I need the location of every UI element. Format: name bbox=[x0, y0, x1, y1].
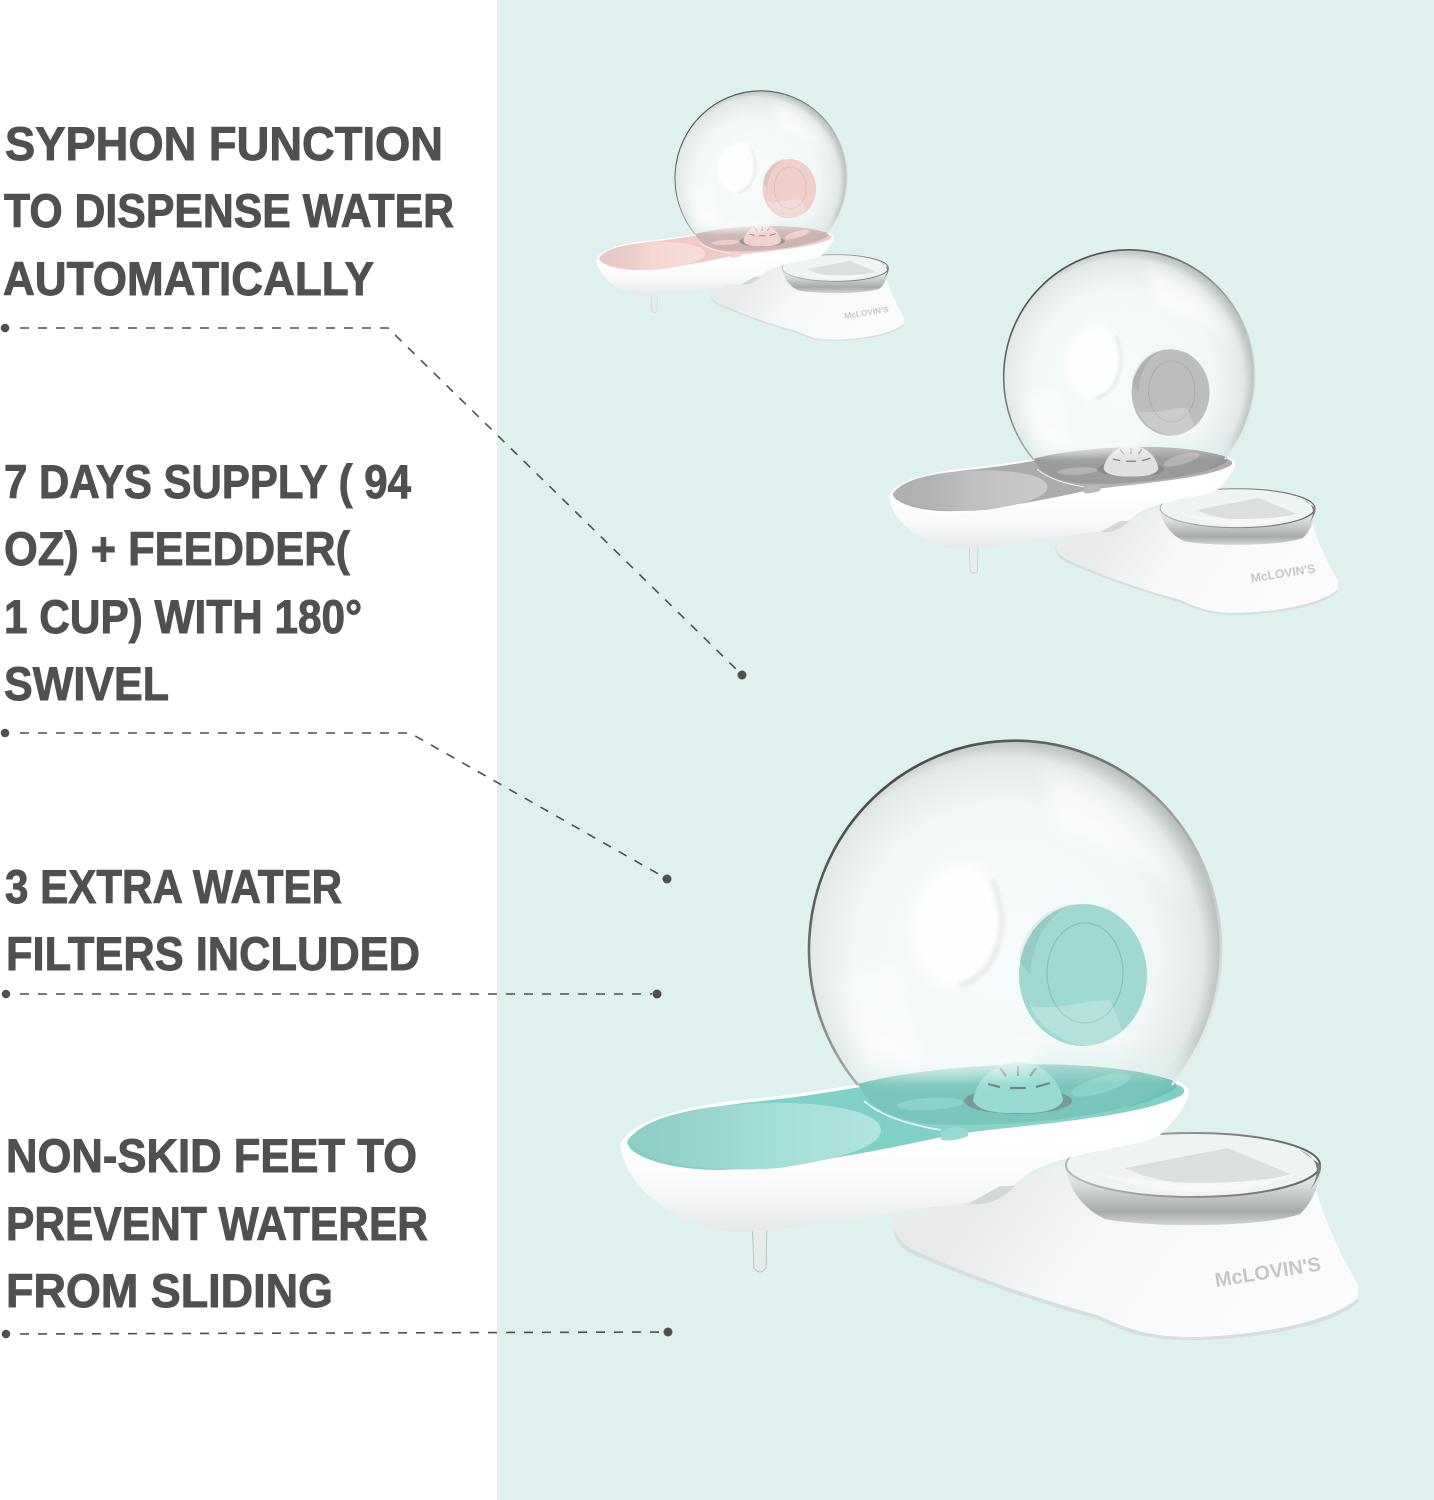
callout line: non-skid feet bbox=[2, 1328, 672, 1338]
text block: non-skid feet: PREVENT WATERER bbox=[6, 1197, 428, 1250]
product: large teal water dispenser bbox=[620, 741, 1358, 1340]
text block: syphon function: TO DISPENSE WATER bbox=[4, 184, 454, 237]
callout line: water filters bbox=[2, 990, 661, 998]
text block: water filters: FILTERS INCLUDED bbox=[6, 927, 420, 980]
text block: syphon function: SYPHON FUNCTION bbox=[5, 117, 443, 170]
panel: mint product background bbox=[497, 0, 1434, 1500]
text block: non-skid feet: FROM SLIDING bbox=[6, 1264, 333, 1317]
text block: water filters: 3 EXTRA WATER bbox=[5, 860, 342, 913]
background: white left column bbox=[0, 0, 497, 1500]
text block: syphon function bbox=[3, 117, 454, 305]
text block: 7 days supply bbox=[4, 455, 411, 710]
text block: water filters bbox=[5, 860, 420, 980]
text block: 7 days supply: OZ) + FEEDDER( bbox=[4, 522, 350, 575]
text block: 7 days supply: 1 CUP) WITH 180° bbox=[4, 590, 362, 643]
callout line: 7 days supply bbox=[1, 729, 671, 884]
product: medium gray water dispenser: McLOVIN'S bbox=[1250, 561, 1316, 585]
product: small pink water dispenser bbox=[596, 91, 904, 341]
callout line: syphon function bbox=[1, 324, 746, 680]
product: small pink water dispenser: McLOVIN'S bbox=[844, 304, 890, 321]
product: large teal water dispenser: McLOVIN'S bbox=[1213, 1253, 1322, 1292]
text block: non-skid feet bbox=[6, 1129, 428, 1317]
text block: non-skid feet: NON-SKID FEET TO bbox=[6, 1129, 417, 1182]
product: medium gray water dispenser bbox=[889, 250, 1338, 615]
text block: syphon function: AUTOMATICALLY bbox=[3, 252, 374, 305]
text block: 7 days supply: 7 DAYS SUPPLY ( 94 bbox=[4, 455, 411, 508]
text block: 7 days supply: SWIVEL bbox=[4, 657, 169, 710]
